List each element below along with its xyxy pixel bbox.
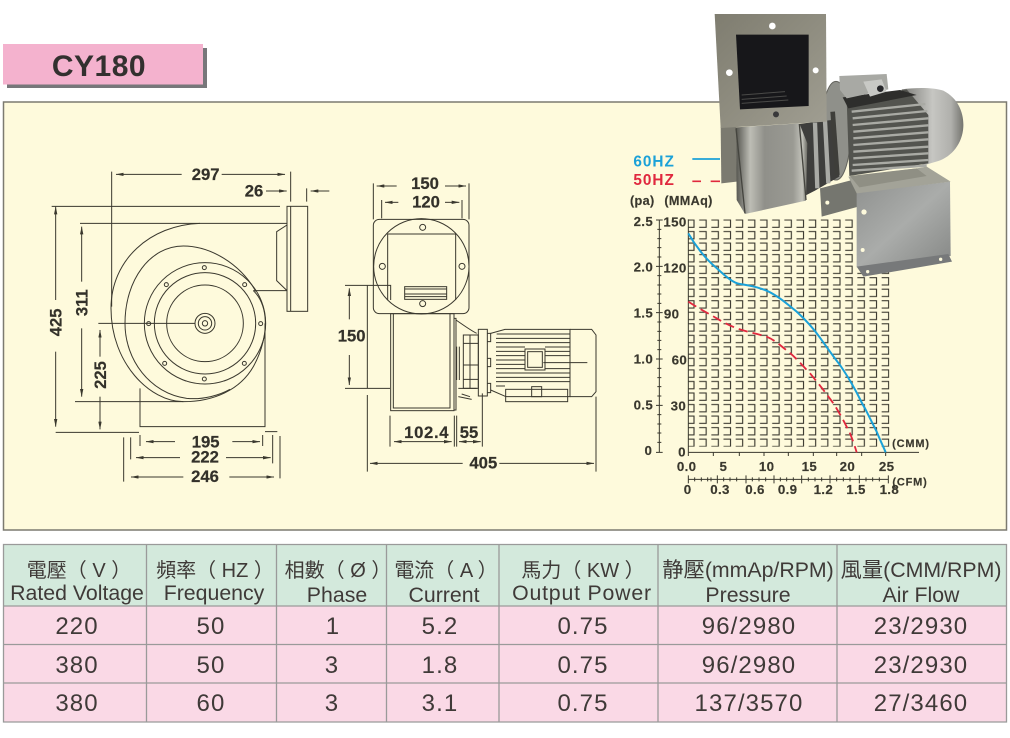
column: phase: 1 — [326, 613, 340, 640]
unit labels: (pa) — [630, 194, 655, 208]
x axis CFM: 0.3 — [710, 482, 730, 497]
column: output power: Output Power — [512, 581, 652, 605]
mounting ring — [821, 81, 851, 180]
column: current: 1.8 — [422, 652, 458, 679]
x axis CFM: 1.5 — [846, 482, 866, 497]
dimensions: 150 — [411, 174, 439, 193]
foot bracket — [848, 167, 952, 277]
left axis pa: 150 — [663, 214, 687, 229]
column: pressure: 137/3570 — [695, 690, 803, 717]
dimensions: 311 — [73, 289, 92, 316]
left axis pa: 2.5 — [634, 214, 653, 229]
x axis CFM: 0.9 — [778, 482, 797, 497]
column: rated voltage: 380 — [55, 652, 99, 679]
x axis CFM: (CFM) — [892, 477, 928, 489]
column: rated voltage: Rated Voltage — [10, 581, 144, 605]
dimensions: 246 — [191, 467, 219, 486]
left axis pa: 1.0 — [634, 351, 653, 366]
dimensions — [47, 165, 329, 486]
legend: 60HZ — [633, 154, 720, 171]
column: output power — [512, 559, 652, 717]
terminal box — [839, 74, 888, 98]
x axis CFM — [684, 475, 928, 497]
motor — [491, 329, 596, 402]
dimensions: 222 — [191, 448, 219, 467]
x axis CMM: 20 — [840, 459, 855, 474]
dimensions: 120 — [412, 192, 440, 211]
left axis pa: 90 — [664, 306, 679, 321]
panel: technical drawing background — [4, 102, 1006, 530]
front view drawing — [338, 174, 596, 472]
left axis pa: 60 — [672, 353, 687, 368]
column: phase: 3 — [325, 652, 339, 679]
column: air flow: Air Flow — [883, 583, 960, 607]
x axis CMM: 25 — [879, 459, 895, 474]
column: pressure: Pressure — [705, 583, 791, 607]
dimensions: 425 — [47, 308, 66, 336]
column: air flow — [841, 558, 1001, 717]
column: phase: 3 — [325, 690, 339, 717]
x axis CMM: (CMM) — [892, 438, 930, 450]
column: rated voltage: 電壓（ V ） — [27, 559, 131, 582]
dimensions: 26 — [245, 182, 263, 201]
column: frequency: 50 — [197, 613, 225, 640]
x axis CMM: 5 — [719, 459, 727, 474]
performance chart — [630, 154, 930, 497]
legend: 60HZ: 60HZ — [633, 154, 675, 171]
blower housing — [736, 123, 807, 214]
x axis CFM: 1.2 — [814, 482, 833, 497]
column: current: Current — [408, 583, 480, 607]
column: rated voltage: 380 — [55, 690, 99, 717]
column: air flow: 風量(CMM/RPM) — [841, 558, 1001, 582]
left axis pa: 120 — [663, 260, 687, 275]
blower body — [391, 314, 491, 411]
dimensions: 405 — [469, 453, 497, 472]
column: current: 電流（ A ） — [394, 559, 498, 582]
column: current — [394, 559, 498, 717]
motor body — [843, 89, 928, 176]
left axis pa: 30 — [671, 399, 686, 414]
column: pressure: 96/2980 — [702, 613, 796, 640]
cooling ribs — [798, 112, 839, 197]
table header — [4, 544, 1006, 606]
column: phase: Phase — [307, 583, 367, 607]
column: frequency: Frequency — [164, 581, 265, 605]
legend: 50HZ — [633, 172, 720, 189]
column: output power: 馬力（ KW ） — [521, 559, 645, 582]
column: frequency — [156, 559, 274, 717]
column: pressure: 96/2980 — [702, 652, 796, 679]
inlet flange — [715, 14, 827, 128]
column: frequency: 50 — [197, 652, 225, 679]
left axis pa: 0 — [678, 445, 686, 460]
column: output power: 0.75 — [557, 652, 609, 679]
x axis CMM: 10 — [759, 459, 774, 474]
title: CY180: CY180 — [52, 50, 146, 83]
dimensions: 225 — [91, 361, 110, 389]
column: air flow: 23/2930 — [874, 652, 968, 679]
column: rated voltage — [10, 559, 144, 717]
rear duct — [721, 127, 737, 183]
dimensions — [338, 174, 594, 472]
scroll housing — [111, 223, 266, 402]
photo: blower with motor — [715, 14, 963, 277]
x axis CMM — [677, 438, 930, 474]
left axis pa: 2.0 — [634, 259, 653, 274]
x axis CFM: 0 — [684, 482, 692, 497]
column: current: 3.1 — [422, 690, 458, 717]
legend: 50HZ: 50HZ — [633, 172, 675, 189]
left axis pa: 1.5 — [634, 305, 653, 320]
dimensions: 55 — [460, 423, 478, 442]
x axis CFM: 0.6 — [745, 482, 765, 497]
x axis CFM: 1.8 — [880, 482, 899, 497]
column: air flow: 27/3460 — [874, 690, 968, 717]
column: pressure: 静壓(mmAp/RPM) — [662, 558, 834, 582]
chart grid — [688, 219, 889, 447]
column: output power: 0.75 — [557, 690, 609, 717]
left axis pa: 0 — [644, 443, 652, 458]
x axis CMM: 0.0 — [677, 459, 696, 474]
column: current: 5.2 — [422, 613, 458, 640]
column: air flow: 23/2930 — [874, 613, 968, 640]
column: frequency: 60 — [197, 690, 225, 717]
column: rated voltage: 220 — [55, 613, 99, 640]
dimensions: 195 — [192, 432, 220, 451]
left axis pa: 0.5 — [634, 397, 653, 412]
dimensions: 150 — [338, 327, 366, 346]
title: CY180 — [3, 44, 207, 88]
column: output power: 0.75 — [557, 613, 609, 640]
column: pressure — [662, 558, 834, 717]
dimensions: 297 — [192, 165, 220, 184]
unit labels: (MMAq) — [664, 194, 713, 208]
column: phase: 相數（ Ø ） — [285, 559, 391, 582]
curve: 60HZ — [688, 233, 886, 452]
curve: 50HZ — [688, 302, 857, 452]
column: frequency: 頻率（ HZ ） — [156, 559, 274, 582]
unit labels — [630, 194, 713, 208]
side view drawing — [47, 165, 329, 486]
end cap — [902, 88, 963, 166]
table body — [4, 606, 1006, 722]
rear bracket — [820, 178, 858, 217]
left axis pa — [634, 214, 688, 460]
column: phase — [285, 559, 391, 717]
x axis CMM: 15 — [802, 459, 817, 474]
spec table — [4, 544, 1006, 722]
dimensions: 102.4 — [404, 423, 449, 442]
